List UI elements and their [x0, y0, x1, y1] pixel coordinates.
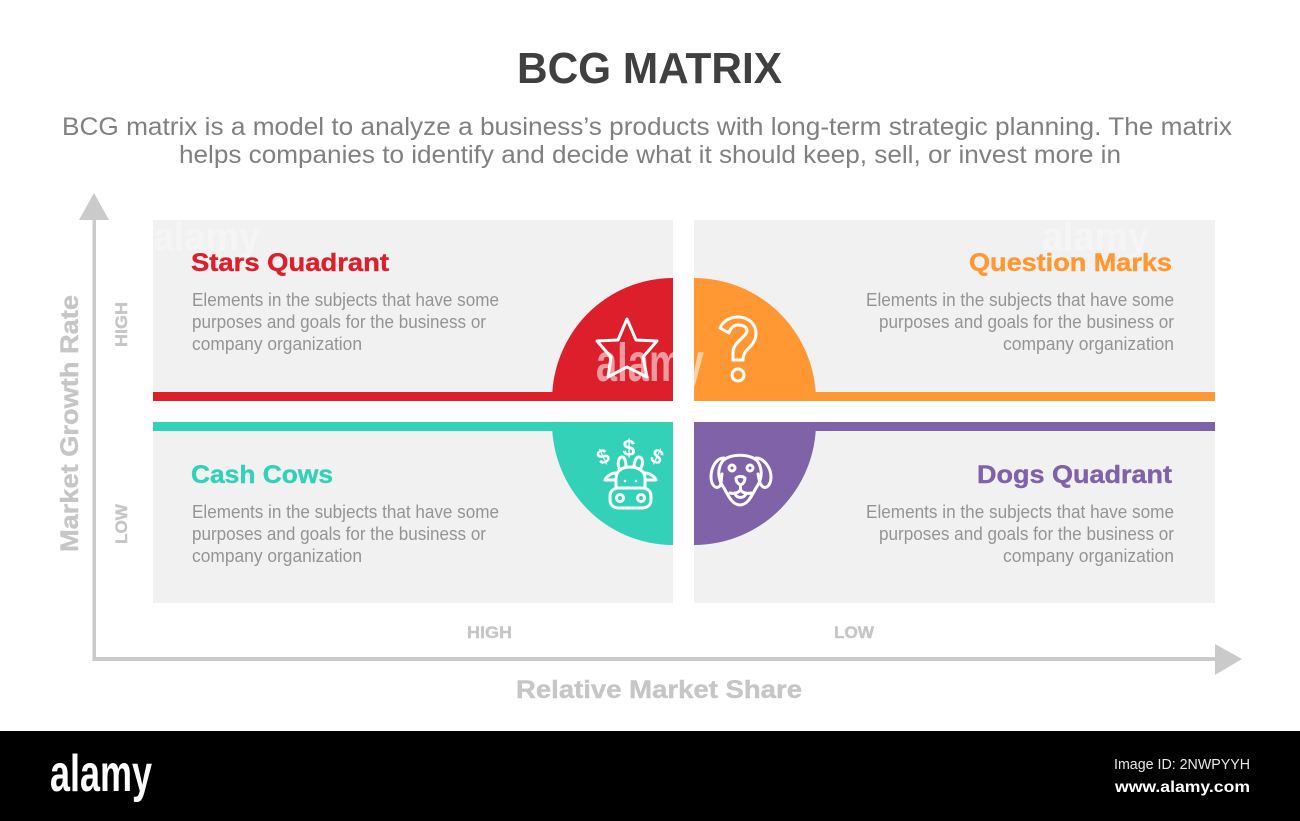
text: stars description: company organization [192, 334, 362, 354]
website: www.alamy.com [1114, 779, 1250, 796]
y axis label: high: HIGH [112, 302, 131, 347]
text: cash cows description [192, 502, 499, 566]
text: question marks description: Elements in the subjects that have some [866, 290, 1174, 310]
x axis label: high: HIGH [467, 623, 512, 642]
text: dogs description [866, 502, 1174, 566]
icon: dog face [711, 455, 771, 505]
icon: cow with dollar signs: $ [623, 435, 636, 461]
subtitle [62, 113, 1233, 169]
heading: question marks: Question Marks [969, 249, 1172, 277]
footer logo: alamy [50, 745, 152, 803]
y axis title: Market Growth Rate [56, 295, 84, 552]
text: dogs description: company organization [1003, 546, 1174, 566]
y axis label: low: LOW [112, 503, 131, 544]
panel: stars quadrant [153, 220, 673, 401]
icon: cow with dollar signs: $ [647, 444, 667, 470]
text: stars description: Elements in the subjects that have some [192, 290, 499, 310]
watermark: top right: alamy [1042, 215, 1150, 259]
text: question marks description: company organization [1003, 334, 1174, 354]
heading: dogs quadrant: Dogs Quadrant [977, 461, 1173, 489]
text: dogs description: purposes and goals for the business or [879, 524, 1174, 544]
footer bar [0, 731, 1300, 821]
text: stars description: purposes and goals for the business or [192, 312, 486, 332]
panel: cash cows [153, 422, 673, 603]
text: stars description [192, 290, 499, 354]
text: question marks description: purposes and goals for the business or [879, 312, 1174, 332]
text: cash cows description: Elements in the subjects that have some [192, 502, 499, 522]
text: cash cows description: company organization [192, 546, 362, 566]
text: cash cows description: purposes and goals for the business or [192, 524, 486, 544]
heading: cash cows: Cash Cows [191, 461, 333, 489]
panel: question marks [694, 220, 1215, 401]
x axis label: low: LOW [834, 623, 875, 642]
subtitle: BCG matrix is a model to analyze a business’s products with long-term strategic planning. The matrix [62, 113, 1233, 141]
icon: cow with dollar signs: $ [593, 444, 614, 470]
text: question marks description [866, 290, 1174, 354]
panel: dogs quadrant [694, 422, 1215, 603]
text: dogs description: Elements in the subjects that have some [866, 502, 1174, 522]
title: BCG MATRIX [517, 44, 782, 93]
icon: star [597, 319, 657, 377]
horizontal axis arrow [92, 644, 1242, 675]
heading: stars quadrant: Stars Quadrant [191, 249, 390, 277]
image id: Image ID: 2NWPYYH [1114, 756, 1250, 773]
vertical axis arrow [79, 193, 109, 660]
x axis title: Relative Market Share [516, 676, 802, 704]
icon: cow with dollar signs [593, 435, 667, 508]
watermark: top left: alamy [153, 215, 261, 259]
icon: question mark [720, 317, 756, 381]
watermark: center: alamy [596, 333, 704, 393]
subtitle: helps companies to identify and decide what it should keep, sell, or invest more in [179, 141, 1121, 169]
